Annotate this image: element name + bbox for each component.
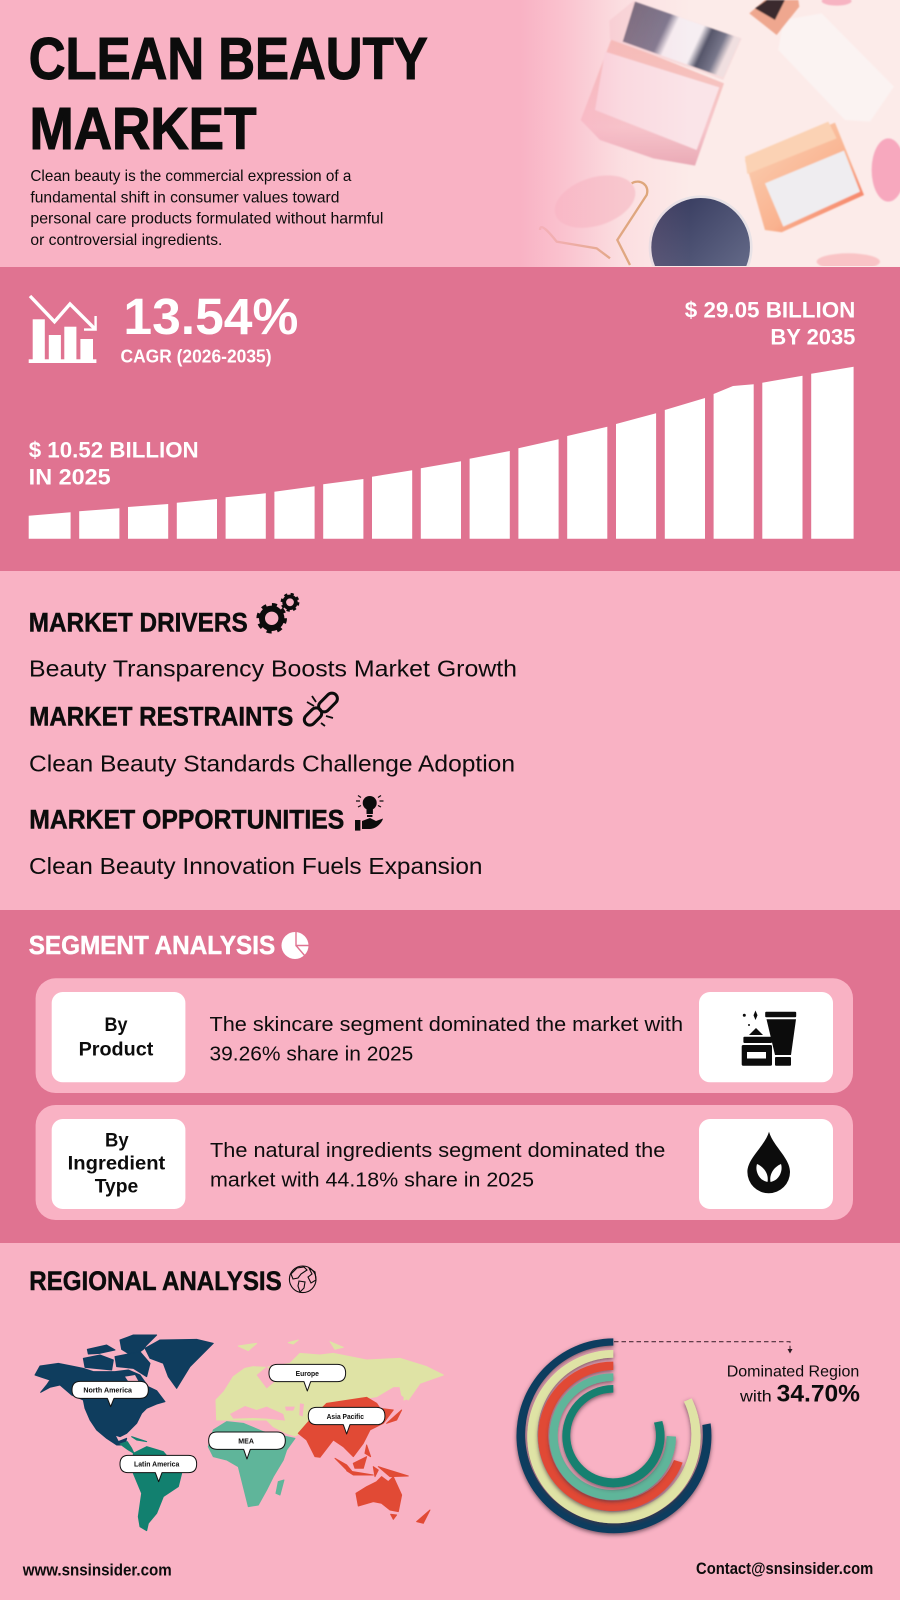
intro text: Clean beauty is the commercial expression of a [30,168,351,185]
map region: Latin America [120,1437,182,1531]
jar one silver lid [623,2,741,77]
intro text [30,168,383,249]
radial bar chart [516,1338,711,1533]
heading: market drivers: MARKET DRIVERS [29,608,248,638]
jar two body [745,123,864,232]
icon: chart with trend arrow [29,296,96,363]
gold roller frame [540,182,647,265]
description: skincare: 39.26% share in 2025 [210,1043,413,1066]
callout: Europe [269,1364,346,1391]
icon: pie chart [282,932,309,959]
CAGR label: CAGR (2026-2035) [120,347,272,367]
restraint text: Clean Beauty Standards Challenge Adoption [29,751,515,777]
heading: market restraints: MARKET RESTRAINTS [29,702,293,732]
opportunity text: Clean Beauty Innovation Fuels Expansion [29,853,482,879]
2035 value: $ 29.05 BILLION [685,297,855,322]
intro text: or controversial ingredients. [30,232,222,249]
intro text: fundamental shift in consumer values toward [30,189,339,206]
icon box: skincare products [699,992,833,1082]
label box: by ingredient type: Type [95,1176,138,1198]
callout: dominated region share: Dominated Region [727,1364,859,1381]
callout: Latin America [120,1455,197,1482]
jar two label [765,151,860,227]
panel: market dynamics [29,594,517,879]
callout: MEA [209,1432,285,1459]
jar one body [581,38,724,166]
callout: Asia Pacific: Asia Pacific [327,1412,364,1421]
2025 value: $ 10.52 BILLION [29,437,199,462]
pink petals [872,138,900,202]
jar one label [595,52,719,150]
2025 value [29,437,199,490]
map region: North America [35,1335,213,1445]
label box: by product [52,992,185,1082]
callout: North America [72,1381,148,1407]
callout: North America: North America [83,1386,133,1395]
driver text: Beauty Transparency Boosts Market Growth [29,656,517,682]
icon: idea hand [355,796,384,831]
title [29,26,428,162]
description: skincare [210,1013,683,1066]
description: natural ingredients [210,1139,665,1192]
callout: dominated region share: with [739,1389,772,1406]
round mirror [648,196,752,266]
callout: MEA: MEA [238,1436,255,1445]
label box: by ingredient type: Ingredient [68,1152,166,1174]
callout: dominated region share [727,1364,860,1408]
intro text: personal care products formulated without harmful [30,211,383,228]
map region: Europe and north Asia [216,1340,443,1436]
description: natural ingredients: market with 44.18% share in 2025 [210,1169,534,1192]
heading: segment analysis: SEGMENT ANALYSIS [29,932,275,960]
icon: broken chain [302,691,340,727]
serum bottle cap [749,0,799,35]
serum bottle body [778,13,894,122]
map region: Asia Pacific [298,1397,430,1523]
callout: Latin America: Latin America [134,1460,180,1469]
footer: contact: Contact@snsinsider.com [696,1559,873,1578]
header photo: cosmetic jars [539,0,900,267]
label box: by ingredient type [52,1119,185,1209]
callout: Europe: Europe [296,1369,319,1378]
2035 value [685,297,855,350]
map: Mediterranean and inland seas [230,1367,304,1421]
label box: by ingredient type: By [105,1130,129,1152]
heading: regional analysis: REGIONAL ANALYSIS [29,1266,282,1296]
label box: by product: Product [79,1038,154,1060]
panel: segment analysis [0,910,900,1243]
map: Hudson Bay [125,1375,140,1387]
callout: Asia Pacific [308,1407,385,1434]
2035 value: BY 2035 [770,325,855,350]
title: MARKET [30,96,256,162]
world map [35,1335,443,1531]
title: CLEAN BEAUTY [29,26,428,92]
arrow: dashed leader to dominated region [614,1342,792,1354]
callout: dominated region share: 34.70% [777,1381,860,1408]
footer: website: www.snsinsider.com [22,1562,172,1580]
CAGR value: 13.54% [123,288,298,345]
heading: market opportunities: MARKET OPPORTUNITIES [29,805,344,835]
rose quartz roller [560,176,636,228]
description: natural ingredients: The natural ingredients segment dominated the [210,1139,665,1162]
row: by ingredient type [36,1105,853,1220]
bar chart: market growth [29,367,854,539]
icon box: water drop with leaves [699,1119,833,1209]
row: by product [36,978,853,1093]
icon: gears [258,594,298,632]
icon: globe [289,1266,316,1293]
panel: market size [0,267,900,571]
2025 value: IN 2025 [29,465,111,490]
label box: by product: By [104,1014,128,1036]
description: skincare: The skincare segment dominated the market with [210,1013,683,1036]
map region: Middle East and Africa [208,1422,295,1507]
